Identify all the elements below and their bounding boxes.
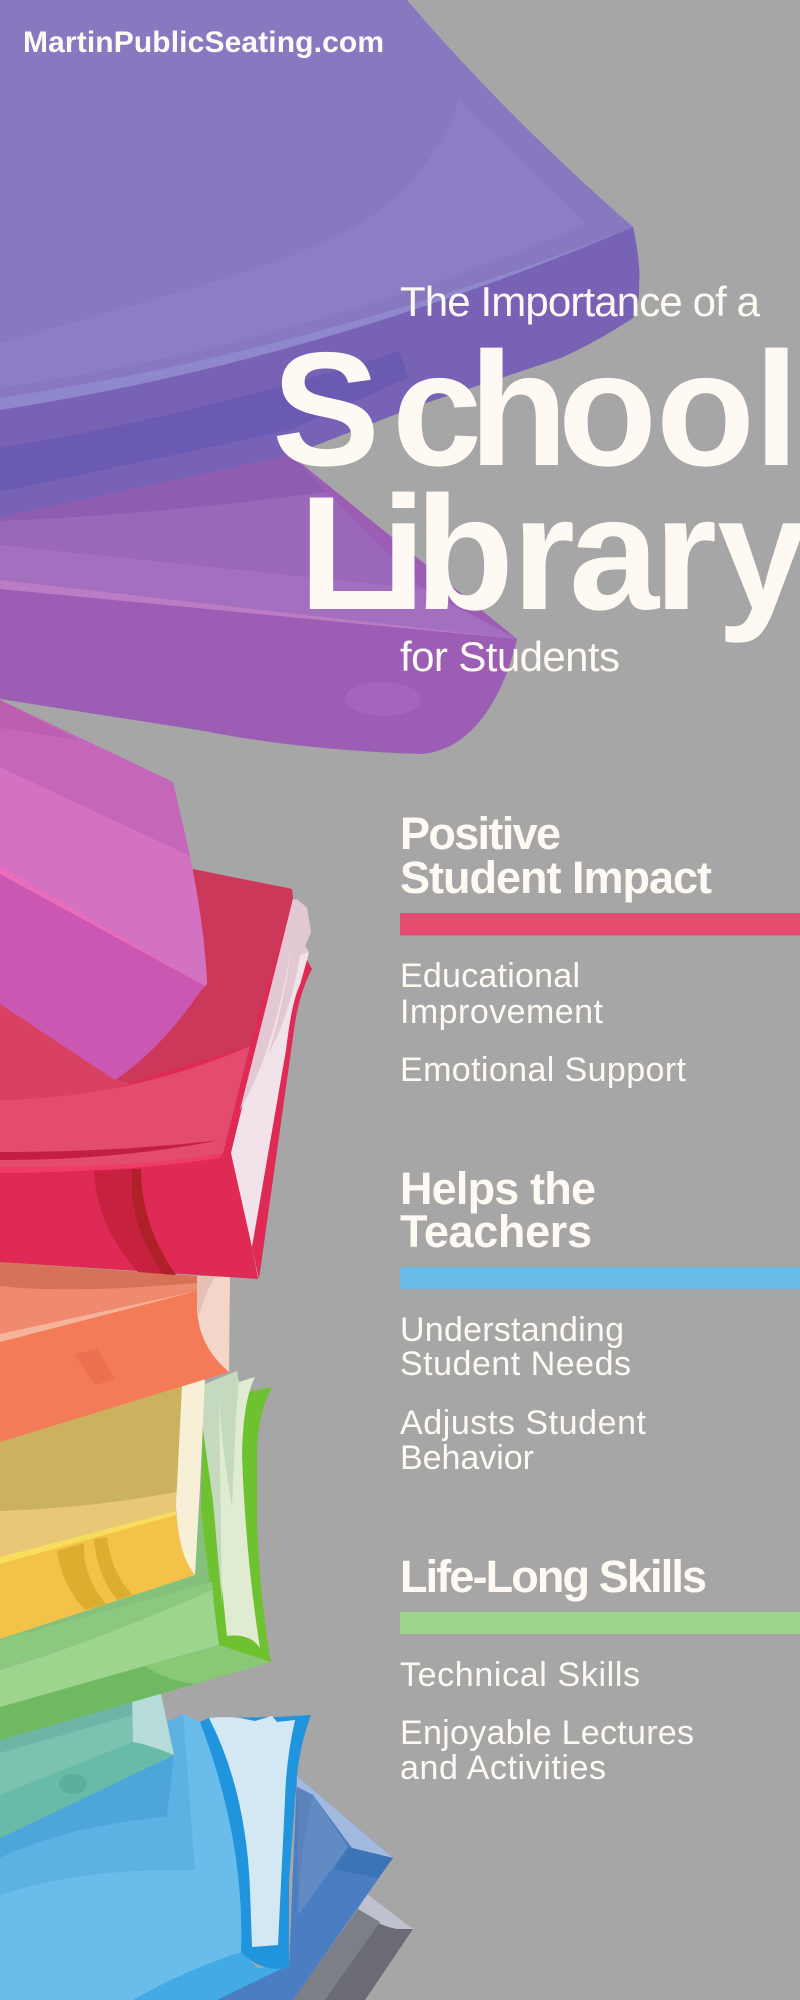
- heading: Student Impact: [400, 852, 712, 903]
- item: Educational Improvement: Educational: [400, 957, 580, 995]
- book: dark blue back: [135, 1776, 393, 2000]
- site name: MartinPublicSeating.com: [23, 26, 384, 59]
- title: Library: Library: [299, 463, 800, 644]
- title: closing line: for Students: [400, 633, 620, 680]
- book: teal: [0, 1680, 174, 1838]
- book: violet upper: [0, 0, 639, 517]
- heading: Life-Long Skills: [400, 1551, 707, 1602]
- item: Technical Skills: Technical Skills: [400, 1656, 640, 1694]
- item: Enjoyable Lectures and Activities: and Activities: [400, 1749, 606, 1787]
- item: Educational Improvement: Improvement: [400, 993, 604, 1031]
- item: Adjusts Student Behavior: Behavior: [400, 1439, 534, 1477]
- item: Enjoyable Lectures and Activities: Enjoyable Lectures: [400, 1714, 694, 1752]
- book: light blue: [0, 1714, 311, 2000]
- title: intro line: The Importance of a: [400, 278, 761, 325]
- item: Understanding Student Needs: Student Needs: [400, 1345, 631, 1383]
- heading: Helps the: [400, 1163, 596, 1214]
- heading: Teachers: [400, 1206, 592, 1257]
- book: green: [0, 1371, 272, 1740]
- item: Adjusts Student Behavior: Adjusts Student: [400, 1404, 647, 1442]
- item: Understanding Student Needs: Understanding: [400, 1311, 624, 1349]
- title block: [272, 278, 800, 680]
- section: Helps the Teachers: [400, 1163, 800, 1477]
- book: pink: [0, 700, 207, 1080]
- heading: Positive: [400, 808, 561, 859]
- section: Life-Long Skills: [400, 1551, 800, 1787]
- section: Positive Student Impact: [400, 808, 800, 1089]
- illustration: stack of books: [0, 0, 639, 2000]
- book: yellow: [0, 1375, 205, 1639]
- accent bar: red: [400, 913, 800, 936]
- book: red: [0, 869, 312, 1279]
- book: purple lower: [0, 440, 517, 754]
- accent bar: green: [400, 1612, 800, 1634]
- title: School: School: [272, 319, 799, 500]
- accent bar: blue: [400, 1267, 800, 1289]
- item: Emotional Support: Emotional Support: [400, 1051, 687, 1089]
- book: grey bottom: [293, 1894, 413, 2000]
- book: orange: [0, 1262, 230, 1442]
